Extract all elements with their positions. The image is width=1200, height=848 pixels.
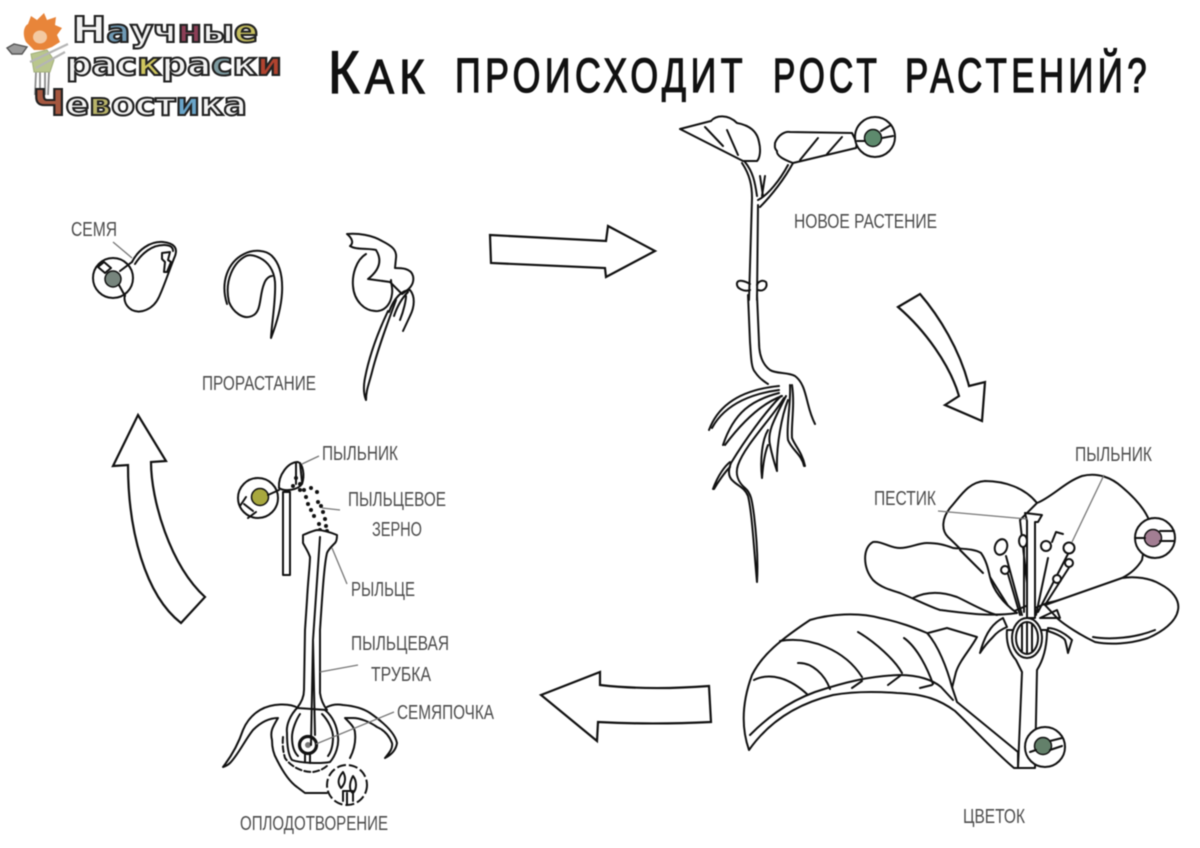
detail circle: mauve cell	[1135, 518, 1175, 558]
leaf behind	[928, 628, 977, 688]
sepals and ovary wall	[223, 704, 397, 793]
label: пыльник: ПЫЛЬНИК	[1075, 444, 1152, 466]
upper right petal	[1020, 475, 1149, 610]
detail circle: olive cell	[238, 478, 279, 518]
title: ПРОИСХОДИТ	[455, 50, 747, 103]
lower stem	[748, 295, 815, 424]
label: пыльник: ПЫЛЬНИК	[322, 443, 398, 465]
title	[328, 39, 1151, 106]
label: новое растение: НОВОЕ РАСТЕНИЕ	[794, 211, 937, 233]
title: РОСТ	[773, 50, 881, 103]
stamens	[993, 532, 1074, 615]
detail circle: green cell	[1025, 727, 1065, 767]
label: рыльце: РЫЛЬЦЕ	[351, 579, 415, 601]
panel: flower	[744, 444, 1178, 828]
seed with circle	[93, 242, 176, 311]
label: пестик: ПЕСТИК	[874, 488, 936, 510]
panel: fertilization	[223, 443, 495, 835]
flower stalk	[1007, 630, 1047, 768]
arrow: to new plant	[490, 226, 655, 277]
left petal	[865, 542, 1017, 615]
stem node	[737, 281, 767, 291]
label: рыльце	[332, 548, 415, 601]
label: пыльцевая трубка	[320, 633, 449, 686]
icon: boy mascot with magnifier	[7, 13, 68, 95]
detail circle: green cell	[855, 117, 895, 157]
panel: new plant	[680, 116, 937, 582]
upper left petal	[943, 481, 1040, 612]
stem and petioles	[742, 162, 793, 300]
label: пыльцевое зерно: ПЫЛЬЦЕВОЕ	[348, 489, 446, 511]
ovary	[1012, 618, 1042, 658]
right petal	[1045, 577, 1178, 644]
label: пыльцевая трубка: ПЫЛЬЦЕВАЯ	[351, 633, 449, 655]
label: пестик	[874, 488, 1027, 519]
label: цветок: ЦВЕТОК	[963, 806, 1025, 828]
pistil with tube	[297, 530, 337, 710]
arrow: to flower	[898, 294, 985, 421]
stamen with anther	[279, 462, 303, 575]
label: пыльцевое зерно	[322, 489, 446, 541]
seedling	[347, 234, 414, 400]
arrow: back to seed	[113, 415, 205, 623]
label: семяпочка: СЕМЯПОЧКА	[397, 702, 495, 724]
logo text line 1: Научные	[72, 10, 258, 51]
label: оплодотворение: ОПЛОДОТВОРЕНИЕ	[240, 813, 388, 835]
logo text line 3: Чевостика	[33, 83, 247, 124]
label: пыльник	[302, 443, 398, 465]
title: КАК	[328, 39, 430, 106]
ovary outline	[287, 707, 338, 763]
logo: Научные раскраски Чевостика	[7, 10, 282, 124]
arrow: to fertilization	[541, 672, 711, 741]
label: пыльцевое зерно: ЗЕРНО	[372, 519, 422, 541]
pistil	[1025, 513, 1042, 618]
label: пыльцевая трубка: ТРУБКА	[371, 664, 432, 686]
label: семя: СЕМЯ	[71, 219, 117, 241]
right leaf	[775, 132, 857, 163]
left leaf	[680, 116, 760, 161]
label: семяпочка	[316, 702, 495, 744]
panel: germination	[71, 219, 414, 400]
label: прорастание: ПРОРАСТАНИЕ	[202, 373, 316, 395]
label: пыльник	[1072, 444, 1152, 542]
pollen grains	[291, 476, 329, 533]
roots	[709, 385, 805, 582]
sepals	[980, 618, 1007, 653]
sprouting seed	[224, 251, 282, 338]
logo text line 2: рас краски	[66, 47, 282, 83]
embryo circle	[327, 765, 367, 805]
